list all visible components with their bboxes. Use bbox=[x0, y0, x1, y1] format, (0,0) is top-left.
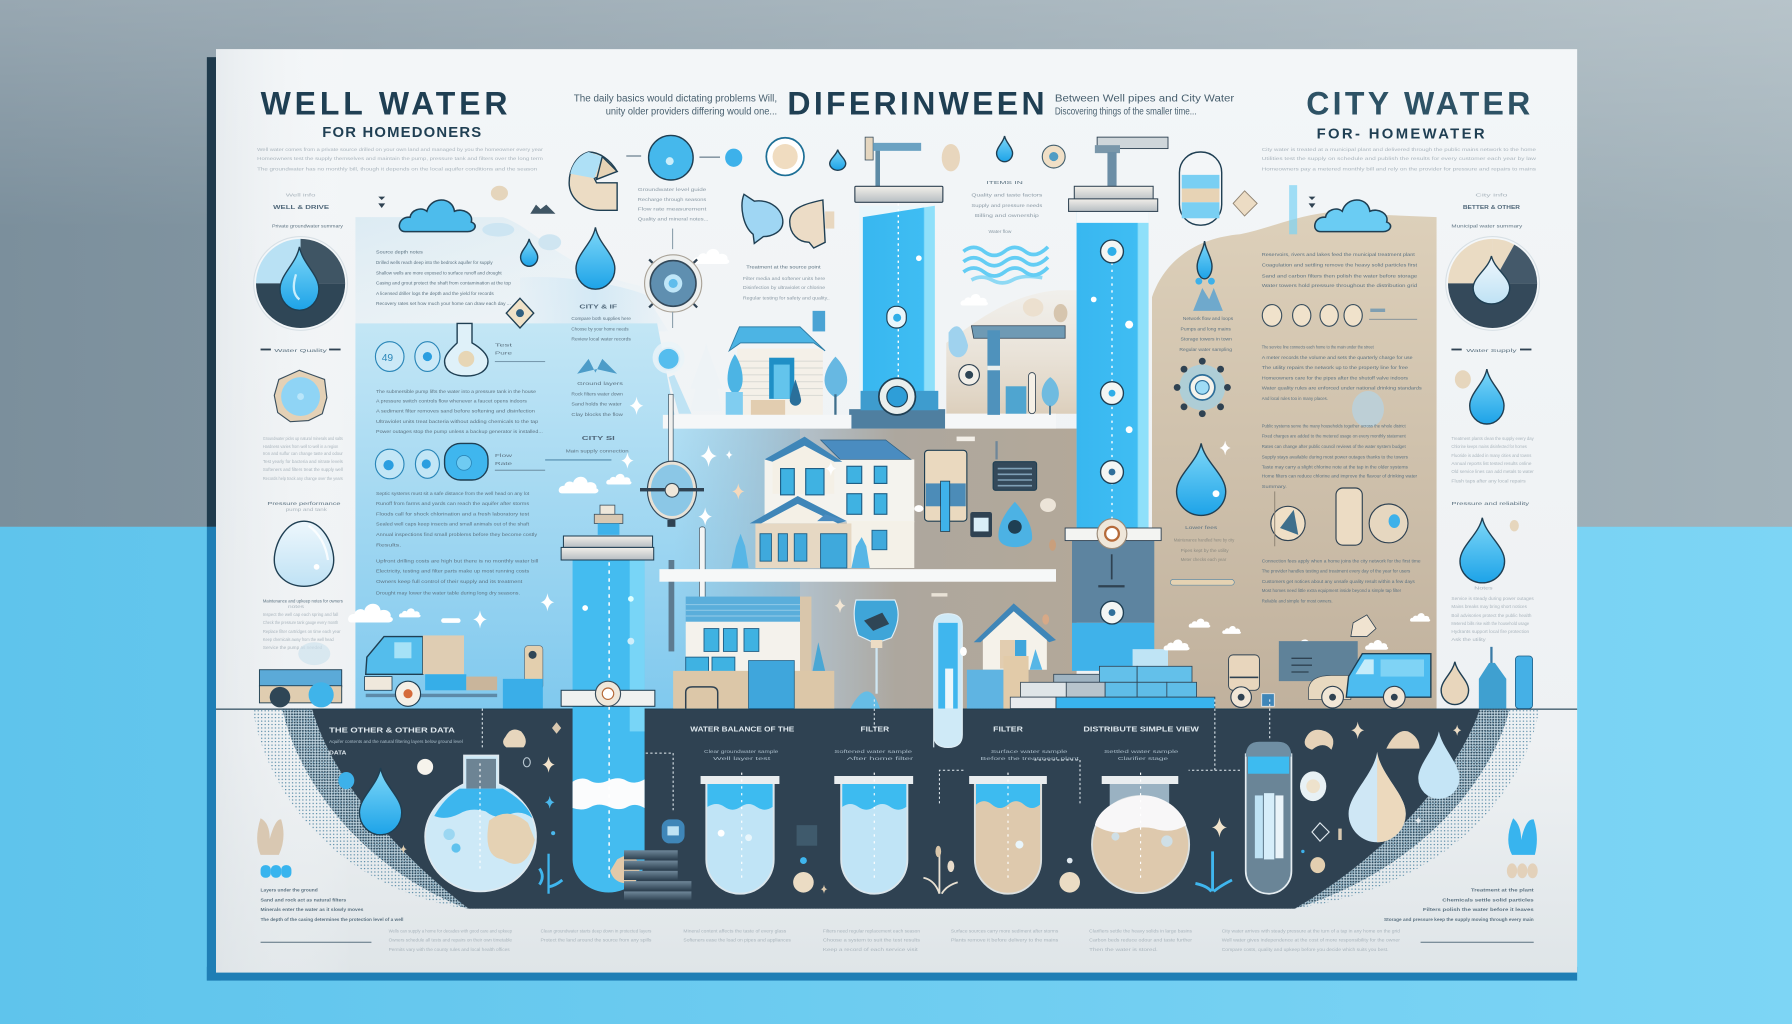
text: well side notes bbox=[566, 305, 631, 455]
left column: heading 1: Well info bbox=[286, 193, 316, 199]
text: left lower: Minerals enter the water as it slowly moves bbox=[261, 907, 364, 913]
text: well panel block 2: Power outages stop the pump unless a backup generator is installed... bbox=[376, 429, 543, 435]
tower: tall city column bbox=[1065, 137, 1168, 671]
text: city intro: City water is treated at a municipal plant and delivered through the public mains network to the home bbox=[1262, 147, 1536, 153]
text: well panel block 4: Drought may lower the water table during long dry seasons. bbox=[376, 590, 520, 596]
text: city panel block 4: Meter checks each year bbox=[1181, 557, 1227, 563]
text: footer columns: Clean groundwater starts deep down in protected layers bbox=[541, 929, 652, 935]
connectors: dashed pipes bbox=[482, 699, 1270, 813]
text: city panel block 2: A meter records the volume and sets the quarterly charge for use bbox=[1262, 355, 1413, 361]
text: footer columns: Surface sources carry more sediment after storms bbox=[951, 929, 1059, 935]
icon: city ring bbox=[1174, 358, 1231, 417]
text: footer columns: Keep a record of each service visit bbox=[823, 947, 919, 953]
text: city panel block 4: Most homes need little extra equipment inside beyond a simple tap filter bbox=[1262, 588, 1402, 594]
text: right lower: Treatment at the plant bbox=[1471, 887, 1534, 893]
text: left block 1: Test yearly for bacteria and nitrate levels bbox=[263, 459, 343, 465]
text: city panel block 3: Public systems serve the many households together across the whole district bbox=[1262, 423, 1406, 429]
icon: small well truck bbox=[259, 642, 342, 707]
text: underground headings: DISTRIBUTE SIMPLE VIEW bbox=[1083, 724, 1199, 733]
title: centre: Discovering things of the smaller time... bbox=[1055, 106, 1197, 117]
icons: city circles row bbox=[1262, 305, 1417, 326]
text: footer columns: Mineral content affects the taste of every glass bbox=[683, 929, 787, 935]
text: well panel block 4 bbox=[376, 558, 538, 596]
text: right lower bbox=[1384, 887, 1534, 923]
text: well panel block 3: Floods call for shock chlorination and a fresh laboratory test bbox=[376, 511, 530, 517]
text: right of gauge: Disinfection by ultraviolet or chlorine bbox=[743, 285, 825, 291]
icons: top row well circles bbox=[626, 135, 846, 180]
text: well panel block 4: Owners keep full control of their supply and its treatment bbox=[376, 579, 523, 585]
text: underground headings: Before the treatment plant bbox=[981, 756, 1080, 762]
text: underground headings: Clear groundwater sample bbox=[704, 749, 779, 755]
text: city col block 1: Chlorine keeps mains disinfected for homes bbox=[1451, 444, 1527, 450]
text: city panel block 4: Reliable and simple for most owners. bbox=[1262, 598, 1333, 604]
title: centre: DIFERINWEEN bbox=[787, 85, 1045, 121]
icons: right underground bbox=[793, 722, 1461, 894]
icons: small well decorations bbox=[378, 186, 561, 266]
icon: small house top bbox=[690, 311, 847, 415]
text: right lower: Storage and pressure keep the supply moving through every main bbox=[1384, 917, 1534, 923]
text: city col block 1: Annual reports list tested results online bbox=[1451, 461, 1532, 467]
text: footer columns: Plants remove it before delivery to the mains bbox=[951, 938, 1059, 944]
text: underground headings: After home filter bbox=[847, 756, 914, 762]
text: city panel block 4: Pipes kept by the utility bbox=[1181, 548, 1229, 554]
icons: city row lower bbox=[1271, 488, 1408, 546]
city column: heading 3: Pressure and reliability bbox=[1451, 501, 1530, 507]
title: well water: WELL WATER bbox=[261, 85, 507, 121]
text: city panel block 2: Water quality rules are enforced under national drinking standards bbox=[1262, 386, 1422, 392]
panel: sand hill bbox=[946, 290, 1077, 414]
text: left block 2: Service the pump as needed bbox=[263, 645, 323, 651]
icon: octagon gauge bbox=[274, 370, 327, 422]
icon: large house bbox=[731, 437, 914, 568]
card bbox=[216, 49, 1577, 973]
text: right lower: Filters polish the water before it leaves bbox=[1423, 907, 1534, 913]
text: left block 1: Records help track any change over the years bbox=[263, 476, 343, 482]
text: city col block 2: Hydrants support local fire protection bbox=[1451, 629, 1529, 635]
dividers: footer rules bbox=[261, 942, 1534, 943]
text: right of gauge bbox=[743, 265, 830, 301]
icon: pale blob bbox=[1352, 391, 1384, 427]
icon: waves bbox=[963, 247, 1048, 283]
text: left block 1: Groundwater picks up natural minerals and salts bbox=[263, 436, 343, 442]
icon: stacked blocks bbox=[1010, 649, 1215, 709]
text: footer columns: Owners schedule all tests and repairs on their own timetable bbox=[389, 938, 512, 944]
text: underground headings: Well layer test bbox=[713, 756, 772, 762]
title: city water: FOR- HOMEWATER bbox=[1317, 126, 1485, 142]
left-right: city column heading 1: BETTER & OTHER bbox=[1463, 205, 1520, 211]
text: underground headings: Surface water sample bbox=[991, 749, 1068, 755]
icon: large well drop bbox=[576, 227, 615, 289]
panel: city water tan bbox=[1152, 213, 1437, 709]
icons: left underground bbox=[338, 722, 562, 894]
text: footer columns: Softeners ease the load on pipes and appliances bbox=[683, 938, 791, 944]
text: city panel block 3: Summary. bbox=[1262, 484, 1287, 490]
text: city panel block 4 bbox=[1174, 525, 1421, 604]
text: city panel block 3: Rates can change after public council reviews of the water system budget bbox=[1262, 444, 1406, 450]
icon: faucet tee with tree bbox=[949, 294, 1067, 415]
text: centre top right: ITEMS IN bbox=[986, 180, 1024, 186]
text: well side notes: Choose by your home needs bbox=[571, 326, 629, 332]
text: footer columns: Then the water is stored. bbox=[1089, 947, 1158, 953]
icon: gauge bbox=[645, 229, 702, 328]
title: centre: The daily basics would dictating problems Will, bbox=[574, 94, 777, 105]
left-right: city column heading 1: Municipal water summary bbox=[1451, 223, 1523, 229]
text: well panel block 1: Source depth notes bbox=[376, 250, 424, 256]
icons: city top bbox=[1179, 152, 1391, 234]
icons: well circles row 2 bbox=[375, 443, 611, 480]
text: centre top right: Quality and taste factors bbox=[971, 193, 1043, 199]
text: city col block 2 bbox=[1451, 586, 1534, 643]
text: city col block 1 bbox=[1451, 436, 1534, 484]
tower: centre top column bbox=[849, 137, 945, 429]
text: city panel block 2 bbox=[1262, 345, 1422, 402]
icon: pale drop bbox=[1418, 731, 1459, 799]
text: well panel block 3: Sealed well caps keep insects and small animals out of the shaft bbox=[376, 522, 530, 528]
icon: slab stack bbox=[610, 850, 691, 901]
text: well panel block 3 bbox=[376, 491, 538, 548]
panel: well water blue bbox=[355, 217, 800, 709]
text: footer columns bbox=[389, 929, 1400, 953]
text: city col block 2: Boil advisories protect the public health bbox=[1451, 613, 1532, 619]
title: well water: FOR HOMEDONERS bbox=[322, 125, 481, 141]
icon: well cloud bbox=[399, 200, 475, 232]
text: city col block 2: Mains breaks may bring short notices bbox=[1451, 604, 1527, 610]
text: city intro: Homeowners pay a metered monthly bill and rely on the provider for pressure and repairs to mains bbox=[1262, 166, 1537, 172]
text: city side notes: Regular water sampling bbox=[1179, 347, 1232, 353]
text: city panel block 1 bbox=[1262, 252, 1418, 289]
text: well side notes: Review local water records bbox=[571, 337, 631, 343]
text: city col block 1: Flush taps after any local repairs bbox=[1451, 478, 1526, 484]
text: city panel block 4: Connection fees apply when a home joins the city network for the first time bbox=[1262, 558, 1421, 564]
text: city panel block 2: The utility repairs the network up to the property line for free bbox=[1262, 365, 1408, 371]
title: centre bbox=[574, 85, 1235, 121]
text: city intro: Utilities test the supply on schedule and publish the results for every customer each year by law bbox=[1262, 156, 1537, 162]
text: right of gauge: Regular testing for safety and quality.. bbox=[743, 295, 830, 301]
pipes: left valve bbox=[640, 394, 705, 651]
text: well side notes: CITY & IF bbox=[579, 305, 618, 311]
tube: softened sample bbox=[834, 773, 913, 894]
icon: tan post with blue base bbox=[503, 646, 543, 709]
text: left lower: Layers under the ground bbox=[261, 887, 318, 893]
text: centre top right: Supply and pressure needs bbox=[971, 203, 1043, 209]
text: city panel block 4: The provider handles testing and treatment every day of the year for users bbox=[1262, 569, 1411, 575]
title: city water bbox=[1306, 85, 1530, 142]
text: footer columns: Wells can supply a home for decades with good care and upkeep bbox=[389, 929, 512, 935]
text: left block 2: Replace filter cartridges on time each year bbox=[263, 629, 341, 635]
title: city water: CITY WATER bbox=[1306, 85, 1530, 121]
left column: heading 2: Water Quality bbox=[274, 348, 328, 354]
text: well panel block 2: A sediment filter removes sand before softening and disinfection bbox=[376, 409, 535, 415]
text: left block 1: Hardness varies from well to well in a region bbox=[263, 444, 339, 450]
icon: blue delivery truck bbox=[365, 635, 497, 706]
text: underground headings bbox=[329, 724, 1199, 762]
text: left lower bbox=[261, 887, 403, 923]
text: left block 2: Inspect the well cap each spring and fall bbox=[263, 612, 338, 618]
title: well water bbox=[261, 85, 507, 141]
text: underground headings: Clarifier stage bbox=[1118, 756, 1169, 762]
icons: top row city bbox=[942, 136, 1065, 171]
left column: heading 3: Pressure performance bbox=[267, 501, 341, 507]
text: right lower: Chemicals settle solid particles bbox=[1442, 898, 1534, 904]
icon: well pie with drop bbox=[254, 237, 347, 330]
left column: heading 1: Private groundwater summary bbox=[272, 223, 344, 229]
icons: speech bubbles bbox=[742, 194, 834, 248]
text: city panel block 2: The service line connects each home to the main under the street bbox=[1262, 345, 1374, 351]
text: footer columns: Compare costs, quality and upkeep before you decide which suits you best. bbox=[1222, 947, 1389, 953]
text: well panel block 1: A licensed driller logs the depth and the yield for records bbox=[376, 291, 494, 297]
tower: well column bbox=[561, 505, 655, 893]
text: under top row: Recharge through seasons bbox=[638, 197, 707, 203]
tube: filter column bbox=[1246, 742, 1291, 894]
text: footer columns: Permits vary with the county rules and local health offices bbox=[389, 947, 510, 953]
text: underground headings: Softened water sample bbox=[834, 749, 913, 755]
text: centre top right: Water flow bbox=[989, 229, 1012, 235]
text: city col block 1: Treatment plants clean the supply every day bbox=[1451, 436, 1534, 442]
text: city col block 2: Notes bbox=[1474, 586, 1493, 592]
icon: tan pie chart bbox=[569, 152, 617, 210]
text: underground headings: FILTER bbox=[993, 724, 1024, 733]
shelf: lower bbox=[659, 569, 1056, 582]
text: city panel block 3: Supply stays available during most power outages thanks to the towers bbox=[1262, 454, 1409, 460]
text: city col block 1: Old service lines can add metals to water bbox=[1451, 469, 1534, 475]
text: well panel block 3: Results. bbox=[376, 542, 401, 548]
icon: city drop 1 bbox=[1455, 369, 1504, 424]
icon: tall capsule bbox=[934, 614, 962, 747]
icons: well circles row 1: Pure bbox=[495, 350, 513, 356]
icon: blue tap head bbox=[850, 600, 898, 709]
text: left block 2: Maintenance and upkeep notes for owners bbox=[263, 598, 343, 604]
text: city side notes: Pumps and long mains bbox=[1181, 326, 1231, 332]
text: well panel block 2: The submersible pump lifts the water into a pressure tank in the house bbox=[376, 389, 536, 395]
text: footer columns: Choose a system to suit the test results bbox=[823, 938, 921, 944]
text: well intro: Homeowners test the supply themselves and maintain the pump, pressure tank and filters over the long term bbox=[257, 156, 543, 162]
text: footer columns: Filters need regular replacement each season bbox=[823, 929, 920, 935]
text: city panel block 3: Home filters can reduce chlorine and improve the flavour of drinking water bbox=[1262, 474, 1418, 480]
icon: city pie with drop bbox=[1446, 237, 1539, 330]
icon: tan bar bbox=[1170, 579, 1234, 585]
text: city panel block 1: Water towers hold pressure throughout the distribution grid bbox=[1262, 283, 1418, 289]
text: well panel block 3: Annual inspections find small problems before they become costly bbox=[376, 532, 538, 538]
text: well intro: The groundwater has no monthly bill, though it depends on the local aquifer conditions and the season bbox=[257, 166, 538, 172]
text: city panel block 1: Coagulation and settling remove the heavy solid particles first bbox=[1262, 262, 1418, 268]
text: well side notes: Ground layers bbox=[577, 381, 624, 387]
text: well panel block 1 bbox=[376, 250, 511, 307]
icons: taupe floating bits bbox=[732, 461, 1049, 656]
text: well side notes: Compare both supplies here bbox=[571, 316, 631, 322]
text: footer columns: Protect the land around the source from any spills bbox=[541, 938, 652, 944]
text: city panel block 2: And local rules too in many places. bbox=[1262, 396, 1328, 402]
icon: half tan drop bbox=[1349, 752, 1406, 842]
text: left lower: The depth of the casing determines the protection level of a well bbox=[261, 917, 403, 923]
text: well panel block 1: Recovery rates set how much your home can draw each day ... bbox=[376, 301, 511, 307]
icons: coral and pills right bbox=[1507, 818, 1538, 878]
text: underground headings: DATA bbox=[329, 750, 346, 756]
title: centre: unity older providers differing would one... bbox=[606, 106, 777, 117]
left column: heading 1: WELL & DRIVE bbox=[273, 205, 329, 211]
left column: heading 3: pump and tank bbox=[286, 507, 328, 513]
text: left lower: Sand and rock act as natural filters bbox=[261, 898, 347, 904]
icon: city cart bbox=[1229, 655, 1274, 707]
text: well side notes: Main supply connection bbox=[566, 449, 629, 455]
text: under top row: Groundwater level guide bbox=[638, 187, 707, 193]
left-right: city column heading 1 bbox=[1451, 193, 1523, 229]
icon: city delivery truck bbox=[1279, 641, 1431, 708]
text: city panel block 3: Fixed charges are added to the metered usage on every monthly statement bbox=[1262, 434, 1406, 440]
icon: large city drop bbox=[1177, 443, 1226, 515]
text: city panel block 1: Reservoirs, rivers and lakes feed the municipal treatment plant bbox=[1262, 252, 1416, 258]
tube: clear sample bbox=[701, 773, 779, 894]
left-right: city column heading 1: City info bbox=[1475, 193, 1508, 199]
icons: city bottles bbox=[1441, 647, 1533, 709]
text: well side notes: Sand holds the water bbox=[571, 402, 622, 408]
panel: underground bbox=[216, 709, 1577, 909]
text: left block 1: Softeners and filters treat the supply well bbox=[263, 467, 343, 473]
flask: settled sample bbox=[1092, 773, 1189, 893]
text: city side notes: Storage towers in town bbox=[1181, 337, 1232, 343]
text: well side notes: CITY SI bbox=[582, 436, 616, 442]
text: centre top right bbox=[971, 180, 1043, 235]
text: well intro bbox=[257, 147, 543, 172]
icon: flask with well water bbox=[425, 755, 536, 891]
icon: pale egg drop bbox=[274, 521, 334, 586]
icon: white plant bbox=[923, 846, 958, 894]
text: well panel block 1: Shallow wells are more exposed to surface runoff and drought bbox=[376, 270, 502, 276]
text: left block 1: Iron and sulfur can change taste and odour bbox=[263, 451, 343, 457]
text: underground headings: FILTER bbox=[861, 724, 890, 733]
city column: heading 2: Water Supply bbox=[1466, 348, 1518, 354]
text: city col block 1: Fluoride is added in many cities and towns bbox=[1451, 453, 1532, 459]
icons: well circles row 1: 49 bbox=[382, 353, 393, 364]
icons: well circles row 2: Rate bbox=[495, 461, 513, 467]
text: well panel block 2: Ultraviolet units treat bacteria without adding chemicals to the tap bbox=[376, 419, 539, 425]
text: city panel block 1: Sand and carbon filters then polish the water before storage bbox=[1262, 274, 1418, 280]
text: well side notes: Clay blocks the flow bbox=[571, 412, 624, 418]
icon: pale circle on pipe bbox=[653, 342, 691, 414]
text: underground headings: WATER BALANCE OF THE bbox=[690, 724, 794, 733]
text: footer columns: Well water gives independence at the cost of more responsibility for the owner bbox=[1222, 938, 1400, 944]
icons: city clouds bbox=[1164, 441, 1430, 650]
text: well panel block 1: Drilled wells reach deep into the bedrock aquifer for supply bbox=[376, 260, 493, 266]
icons: taupe wall devices bbox=[925, 437, 1056, 551]
text: well panel block 2: A pressure switch controls flow whenever a faucet opens indoors bbox=[376, 398, 528, 404]
tube: tan sample bbox=[969, 773, 1047, 894]
text: well intro: Well water comes from a private source drilled on your own land and managed by you the homeowner every year bbox=[257, 147, 543, 153]
text: left block 2: Keep chemicals away from the well head bbox=[263, 637, 334, 643]
text: well panel block 3: Septic systems must sit a safe distance from the well head on any lot bbox=[376, 491, 530, 497]
text: well panel block 4: Electricity, testing and filter parts make up most running costs bbox=[376, 569, 530, 575]
text: well panel block 2 bbox=[376, 389, 543, 435]
text: footer columns: City water arrives with steady pressure at the turn of a tap in any home on the grid bbox=[1222, 929, 1400, 935]
text: city side notes bbox=[1179, 316, 1234, 353]
text: right of gauge: Treatment at the source point bbox=[746, 265, 821, 271]
left column: heading 1 bbox=[272, 193, 344, 229]
text: underground headings: Settled water sample bbox=[1104, 749, 1179, 755]
text: well panel block 1: Casing and grout protect the shaft from contamination at the top bbox=[376, 281, 511, 287]
text: underground headings: Aquifer contents and the natural filtering layers below ground level bbox=[329, 739, 463, 745]
panel: centre backdrop bbox=[674, 429, 1077, 709]
text: city col block 2: Service is steady during power outages bbox=[1451, 596, 1534, 602]
text: city panel block 4: Lower fees bbox=[1185, 525, 1218, 531]
icon: diamond badge bbox=[506, 298, 534, 328]
text: well panel block 4: Upfront drilling costs are high but there is no monthly water bill bbox=[376, 558, 538, 564]
icon: chip bbox=[662, 819, 817, 846]
left column: heading 3 bbox=[267, 501, 341, 513]
text: under top row: Quality and mineral notes... bbox=[638, 217, 709, 223]
text: left block 2 bbox=[263, 598, 343, 651]
text: well side notes: Rock filters water down bbox=[571, 391, 623, 397]
text: footer columns: Clarifiers settle the heavy solids in large basins bbox=[1089, 929, 1193, 935]
text: left block 2: Check the pressure tank gauge every month bbox=[263, 620, 339, 626]
text: left block 2: notes bbox=[288, 604, 305, 610]
text: right of gauge: Filter media and softener units here bbox=[743, 276, 825, 282]
text: left block 1 bbox=[263, 436, 343, 482]
text: city panel block 2: Homeowners care for the pipes after the shutoff valve indoors bbox=[1262, 375, 1409, 381]
shelf: upper bbox=[663, 414, 1056, 429]
icons: well circles row 1 bbox=[375, 323, 545, 376]
left column: heading 2 bbox=[261, 348, 341, 354]
icons: well circles row 1: Test bbox=[495, 342, 513, 348]
text: centre top right: Billing and ownership bbox=[975, 213, 1039, 219]
text: under top row: Flow rate measurement bbox=[638, 206, 707, 212]
text: city col block 2: Ask the utility bbox=[1451, 637, 1486, 643]
text: well panel block 3: Runoff from farms and yards can reach the aquifer after storms bbox=[376, 501, 530, 507]
text: city panel block 4: Customers get notices about any unsafe quality result within a few days bbox=[1262, 579, 1415, 585]
text: underground headings: THE OTHER & OTHER DATA bbox=[329, 726, 456, 735]
text: city col block 2: Metered bills rise with the household usage bbox=[1451, 621, 1529, 627]
title: centre: Between Well pipes and City Water bbox=[1055, 94, 1235, 105]
text: city panel block 4: Maintenance handled here by city bbox=[1174, 538, 1235, 544]
text: under top row bbox=[638, 187, 709, 223]
icon: lower house bbox=[673, 597, 834, 709]
text: city side notes: Network flow and loops bbox=[1183, 316, 1234, 322]
icon: small city house bbox=[967, 603, 1056, 709]
text: footer columns: Carbon beds reduce odour and taste further bbox=[1089, 938, 1192, 944]
text: city panel block 3: Taste may carry a slight chlorine note at the tap in the older systems bbox=[1262, 465, 1409, 471]
icons: well clouds and sparkles bbox=[348, 249, 733, 629]
icon: city drop with mountains bbox=[1193, 241, 1223, 311]
city column: heading 2 bbox=[1451, 348, 1531, 354]
text: city intro bbox=[1262, 147, 1537, 172]
text: city panel block 3 bbox=[1262, 423, 1418, 490]
icons: well circles row 2: Flow bbox=[495, 453, 513, 459]
icons: coral and pills left bbox=[257, 818, 291, 878]
icon: city drop 2 bbox=[1460, 518, 1519, 583]
